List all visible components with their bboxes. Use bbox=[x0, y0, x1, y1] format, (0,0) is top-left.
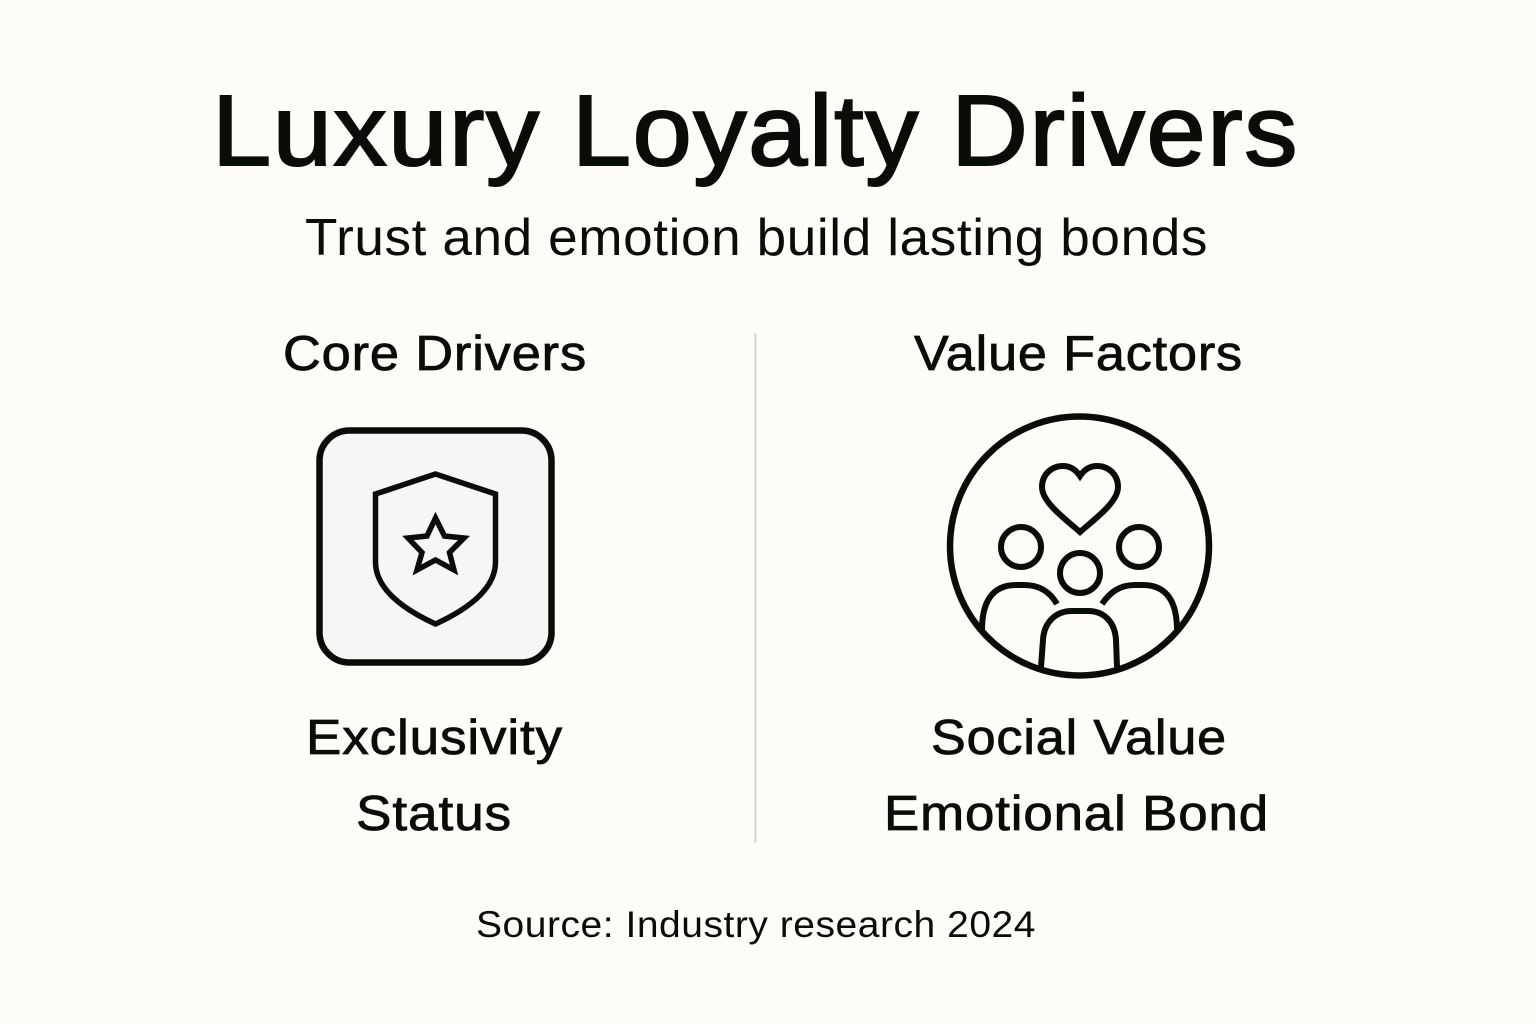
icon: shield with star bbox=[320, 430, 552, 662]
person: left bbox=[982, 527, 1057, 630]
title: Luxury Loyalty Drivers bbox=[212, 75, 1299, 187]
icon: people with heart bbox=[950, 416, 1209, 676]
heading: core drivers: Core Drivers bbox=[283, 327, 587, 381]
label: exclusivity: Exclusivity bbox=[306, 711, 563, 765]
label: status: Status bbox=[356, 787, 512, 841]
label: social value: Social Value bbox=[931, 711, 1227, 765]
source note: Source: Industry research 2024 bbox=[476, 904, 1036, 945]
heart bbox=[1042, 466, 1118, 532]
heading: value factors: Value Factors bbox=[914, 327, 1243, 381]
person: right bbox=[1102, 527, 1177, 630]
subtitle: Trust and emotion build lasting bonds bbox=[305, 209, 1208, 267]
label: emotional bond: Emotional Bond bbox=[884, 787, 1269, 841]
person: centre bbox=[1041, 553, 1117, 667]
